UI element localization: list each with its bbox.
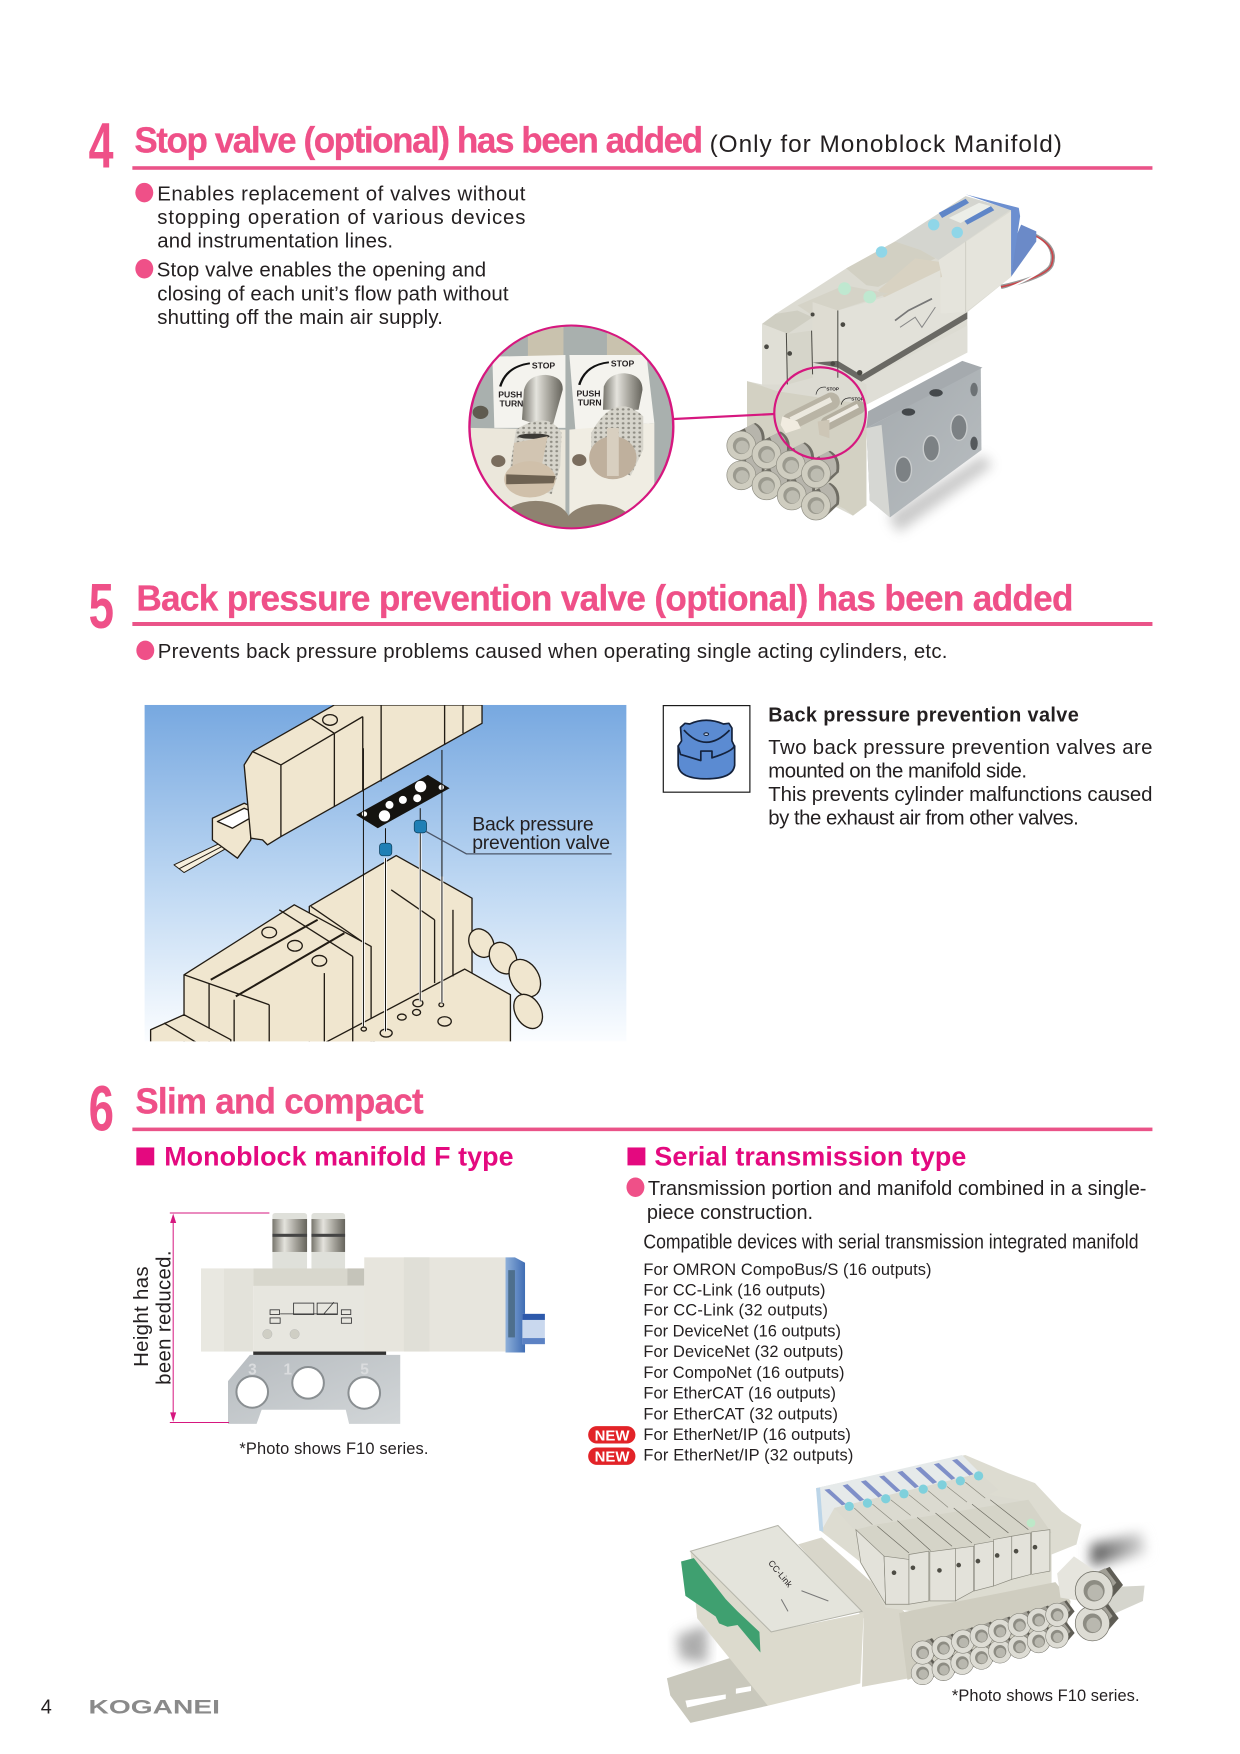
compatible devices list: For CC-Link (32 outputs)	[643, 1302, 828, 1320]
subheading: serial transmission type: Serial transmission type	[654, 1141, 966, 1171]
photo: manifold with stop valves: STOP	[826, 387, 839, 392]
callout text: back pressure prevention valve: by the exhaust air from other valves.	[768, 808, 1079, 830]
photo: monoblock manifold with height dimension: 1	[284, 1361, 293, 1378]
bullet: prevents back pressure: Prevents back pressure problems caused when operating single acting cylinders, etc.	[158, 641, 947, 663]
detail callout: magnified stop valves: PUSH	[577, 388, 600, 398]
callout text: back pressure prevention valve: Back pressure prevention valve	[768, 705, 1079, 727]
compatible devices list: For EtherNet/IP (16 outputs)	[643, 1426, 851, 1444]
section number 5: 5	[89, 571, 114, 642]
rotated label: height has been reduced: been reduced.	[154, 1250, 176, 1385]
photo: monoblock manifold with height dimension: 5	[360, 1361, 369, 1378]
caption: serial photo note: *Photo shows F10 series.	[952, 1687, 1140, 1705]
callout text: back pressure prevention valve: Two back pressure prevention valves are	[768, 737, 1152, 759]
detail callout: magnified stop valves: TURN	[499, 398, 523, 408]
section 4: stop valve	[89, 111, 1152, 544]
section 5: back pressure prevention valve	[89, 571, 1152, 1043]
badge: new ethernet/ip 32: NEW	[595, 1450, 630, 1466]
heading: back pressure prevention valve: Back pressure prevention valve (optional) has been added	[136, 579, 1073, 619]
detail callout: magnified stop valves	[469, 324, 676, 544]
label: back pressure prevention valve: Back pressure	[472, 813, 594, 835]
footer: KOGANEI logo: KOGANEI	[89, 1697, 220, 1719]
subheading: monoblock manifold F type: Monoblock manifold F type	[164, 1141, 514, 1171]
rotated label: height has been reduced	[131, 1250, 176, 1385]
compatible devices list	[643, 1261, 932, 1464]
illustration: exploded manifold with back pressure valves	[145, 705, 626, 1043]
heading: slim and compact: Slim and compact	[135, 1082, 424, 1122]
bullet list: stop valve benefits: closing of each unit’s flow path without	[157, 284, 509, 306]
photo: serial transmission manifold on DIN rail	[667, 1455, 1146, 1723]
callout text: back pressure prevention valve: This prevents cylinder malfunctions caused	[768, 784, 1152, 806]
label: back pressure prevention valve	[472, 813, 610, 854]
photo: monoblock manifold with height dimension	[170, 1213, 545, 1424]
bullet list: stop valve benefits: stopping operation of various devices	[157, 207, 525, 229]
icon: blue back pressure valve in frame	[663, 706, 750, 792]
compatible devices list: For OMRON CompoBus/S (16 outputs)	[643, 1261, 932, 1279]
badge: new ethernet/ip 16	[588, 1426, 635, 1444]
badge: new ethernet/ip 16: NEW	[595, 1428, 630, 1444]
caption: monoblock photo note: *Photo shows F10 series.	[239, 1440, 428, 1458]
detail callout: magnified stop valves: STOP	[532, 360, 555, 370]
bullet: transmission and manifold single-piece: Transmission portion and manifold combined in a single-	[648, 1178, 1146, 1200]
heading: stop valve: Stop valve (optional) has been added	[134, 120, 702, 160]
photo: manifold with stop valves: STOP	[851, 397, 864, 402]
footer: page number: 4	[41, 1697, 52, 1719]
badge: new ethernet/ip 32	[588, 1448, 635, 1466]
photo: serial transmission manifold on DIN rail: CC-Link	[766, 1558, 795, 1590]
section number 4: 4	[89, 111, 114, 182]
bullet list: stop valve benefits: shutting off the main air supply.	[157, 307, 443, 329]
callout text: back pressure prevention valve: mounted on the manifold side.	[768, 760, 1027, 782]
section 6: slim and compact	[89, 1074, 1152, 1723]
compatible devices list: For EtherNet/IP (32 outputs)	[643, 1446, 853, 1464]
bullet: transmission and manifold single-piece	[626, 1178, 1146, 1224]
rotated label: height has been reduced: Height has	[131, 1266, 153, 1367]
section number 6: 6	[89, 1074, 114, 1145]
label: back pressure prevention valve: prevention valve	[472, 832, 610, 854]
bullet list: stop valve benefits	[135, 183, 526, 329]
detail callout: magnified stop valves: TURN	[578, 397, 602, 407]
photo: manifold with stop valves	[727, 194, 1053, 532]
compatible devices list: For DeviceNet (16 outputs)	[643, 1323, 841, 1341]
compatible devices heading: Compatible devices with serial transmission integrated manifold	[643, 1231, 1139, 1253]
detail callout: magnified stop valves: STOP	[611, 359, 634, 369]
photo: monoblock manifold with height dimension: 3	[248, 1361, 257, 1378]
bullet list: stop valve benefits: Enables replacement of valves without	[157, 184, 526, 206]
callout text: back pressure prevention valve	[768, 705, 1152, 830]
detail callout: magnified stop valves: PUSH	[498, 389, 522, 399]
compatible devices list: For DeviceNet (32 outputs)	[643, 1343, 843, 1361]
compatible devices list: For CC-Link (16 outputs)	[643, 1281, 826, 1299]
heading note: only for monoblock manifold: (Only for Monoblock Manifold)	[710, 131, 1062, 158]
compatible devices list: For EtherCAT (16 outputs)	[643, 1384, 836, 1402]
bullet list: stop valve benefits: Stop valve enables the opening and	[157, 260, 486, 282]
compatible devices list: For EtherCAT (32 outputs)	[643, 1406, 838, 1424]
bullet list: stop valve benefits: and instrumentation lines.	[157, 230, 393, 252]
bullet: transmission and manifold single-piece: piece construction.	[647, 1202, 813, 1224]
magnifier circle and leader line	[674, 367, 866, 459]
compatible devices list: For CompoNet (16 outputs)	[643, 1364, 844, 1382]
